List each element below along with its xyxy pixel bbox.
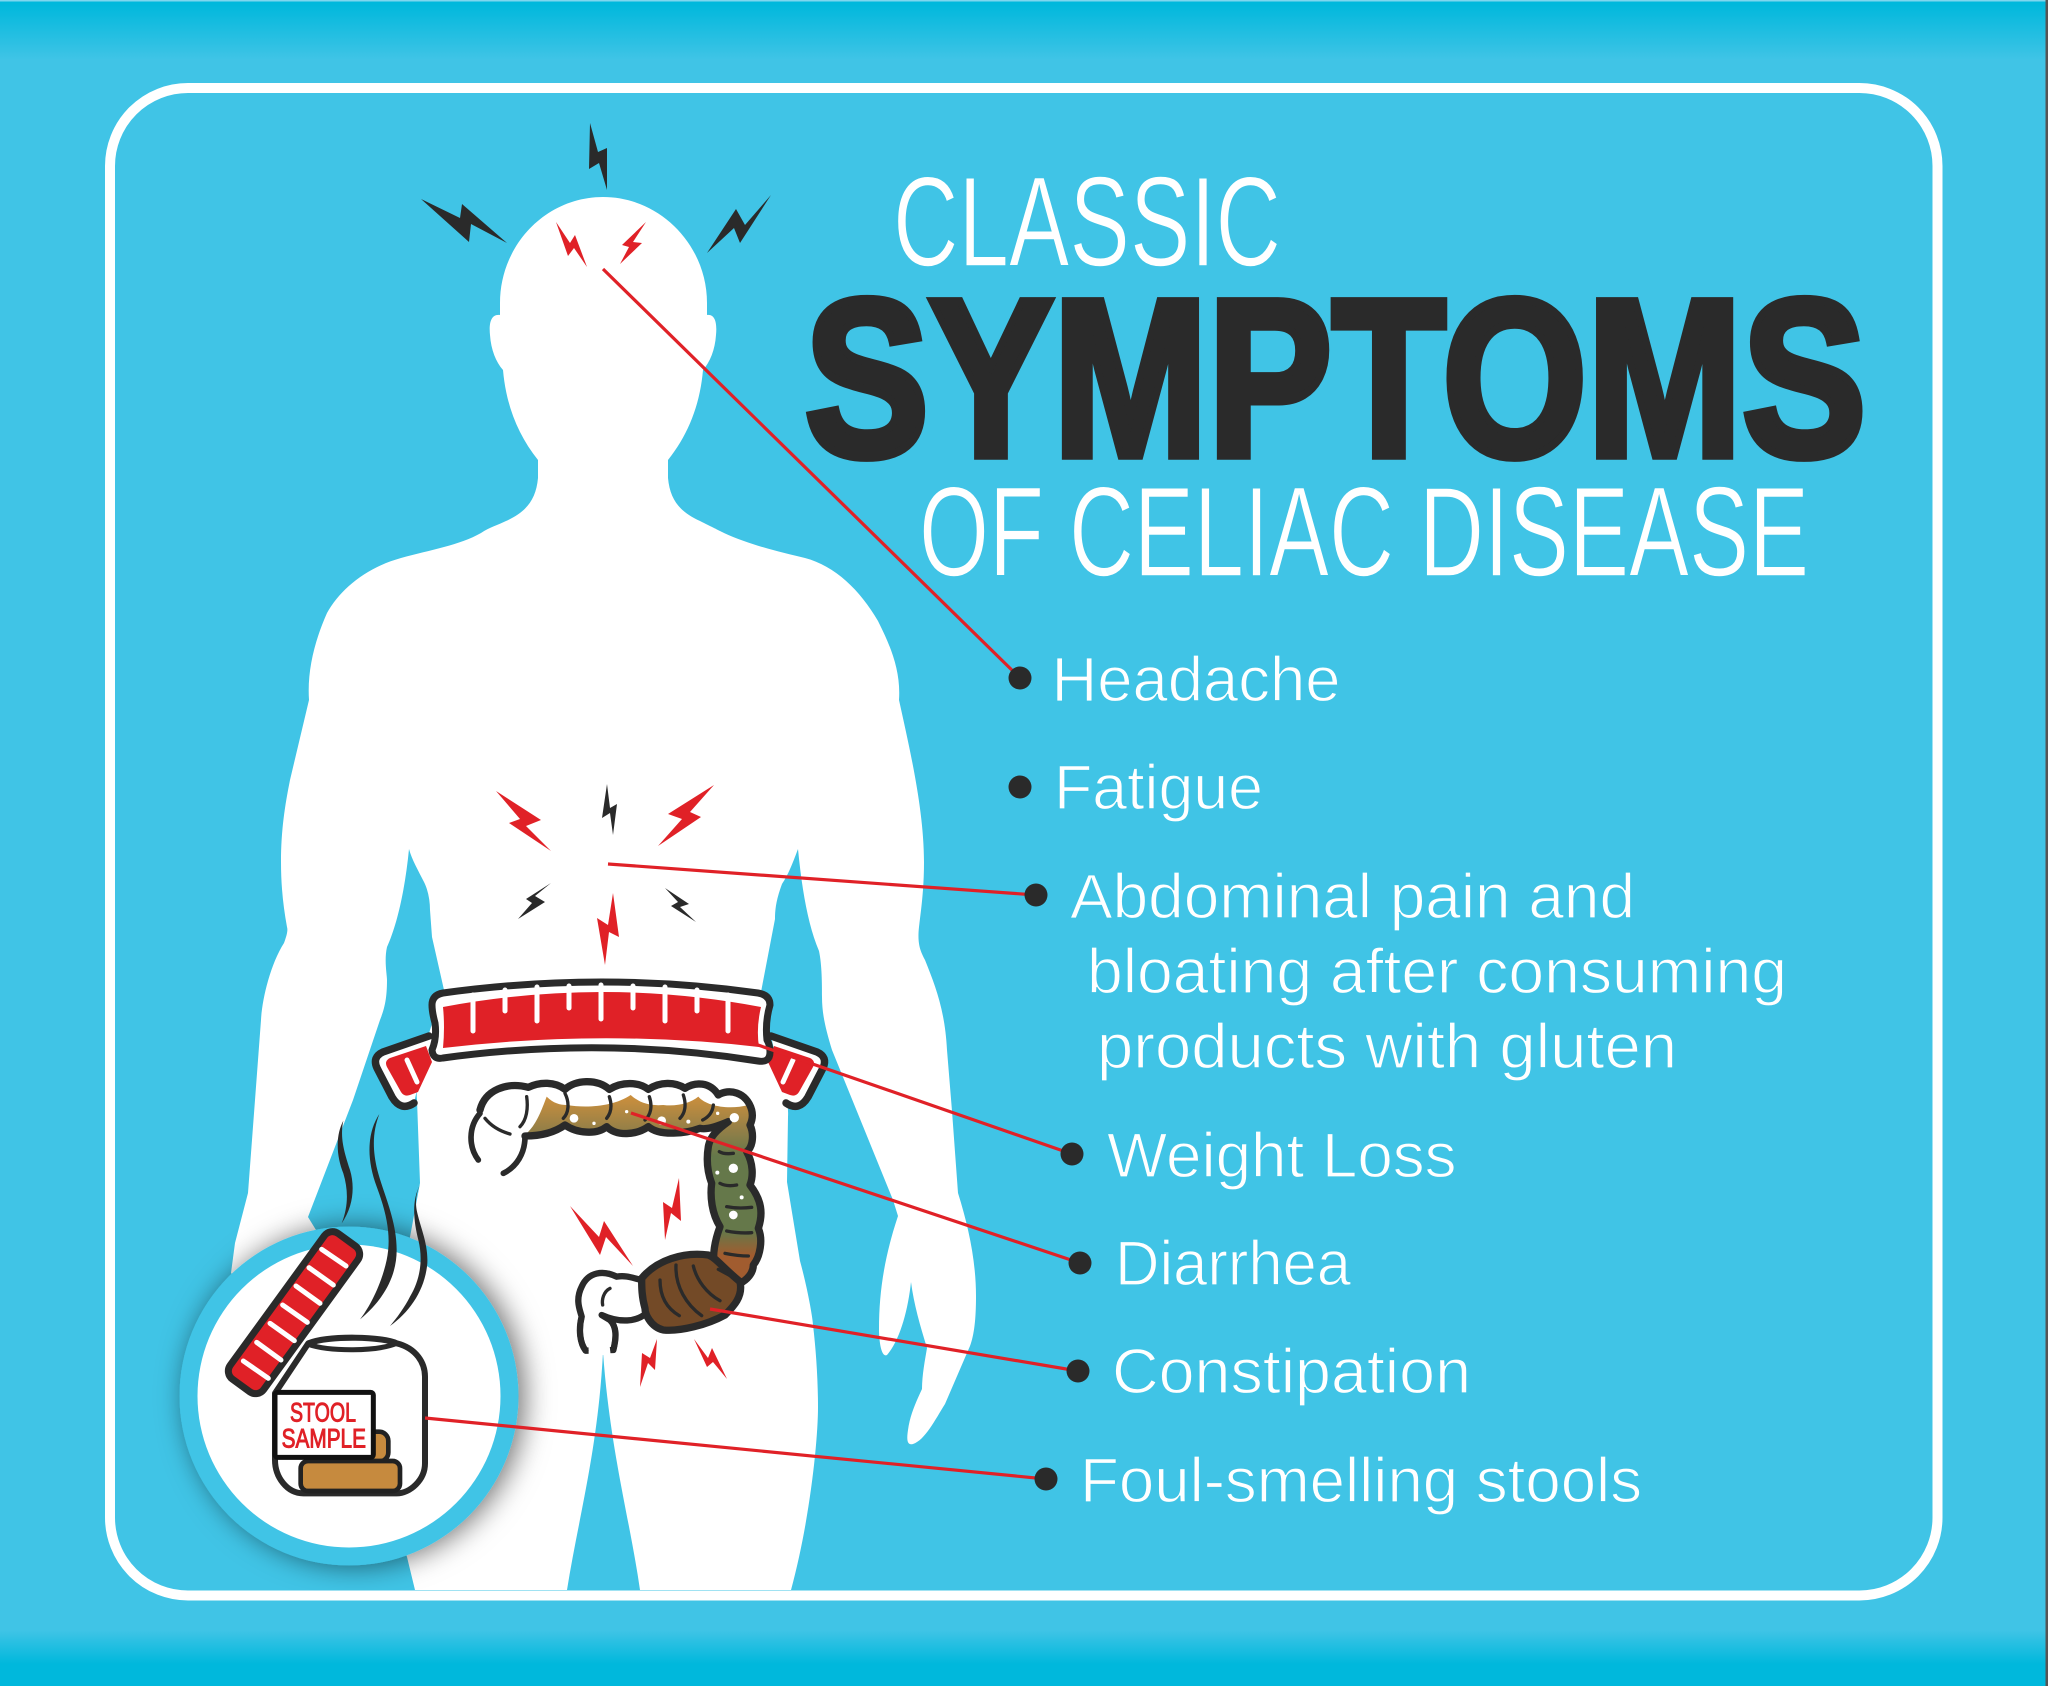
jar label — [275, 1392, 373, 1457]
headache bolts — [421, 123, 771, 267]
jar label: STOOL — [290, 1398, 356, 1428]
stool sample disc — [180, 1226, 518, 1566]
symptom list — [1052, 645, 1787, 1516]
symptom bullets — [1008, 666, 1092, 1490]
abdominal pain bolts — [496, 784, 714, 965]
intestinal pain bolts — [570, 1178, 727, 1387]
white rounded frame — [110, 88, 1938, 1596]
title — [805, 151, 1866, 604]
stool — [301, 1432, 400, 1491]
jar body — [275, 1338, 425, 1493]
item: abdominal line 2: bloating after consuming — [1087, 937, 1787, 1007]
item: headache: Headache — [1052, 645, 1340, 715]
item: abdominal line 3: products with gluten — [1097, 1012, 1677, 1082]
colon illustration — [471, 1082, 761, 1355]
item: diarrhea: Diarrhea — [1115, 1229, 1352, 1299]
jar label: SAMPLE — [282, 1423, 366, 1453]
item: fatigue: Fatigue — [1054, 753, 1263, 823]
title line: classic: CLASSIC — [893, 151, 1281, 294]
stool sample jar — [224, 1114, 427, 1493]
measuring tape belt — [375, 982, 825, 1106]
item: foul-smelling stools: Foul-smelling stools — [1080, 1446, 1642, 1516]
jar lid — [224, 1228, 364, 1398]
item: abdominal pain: Abdominal pain and — [1070, 862, 1635, 932]
item: constipation: Constipation — [1112, 1337, 1471, 1407]
white body silhouette — [231, 197, 976, 1590]
steam — [338, 1114, 427, 1326]
item: weight loss: Weight Loss — [1107, 1121, 1456, 1191]
leader lines — [425, 269, 1080, 1479]
